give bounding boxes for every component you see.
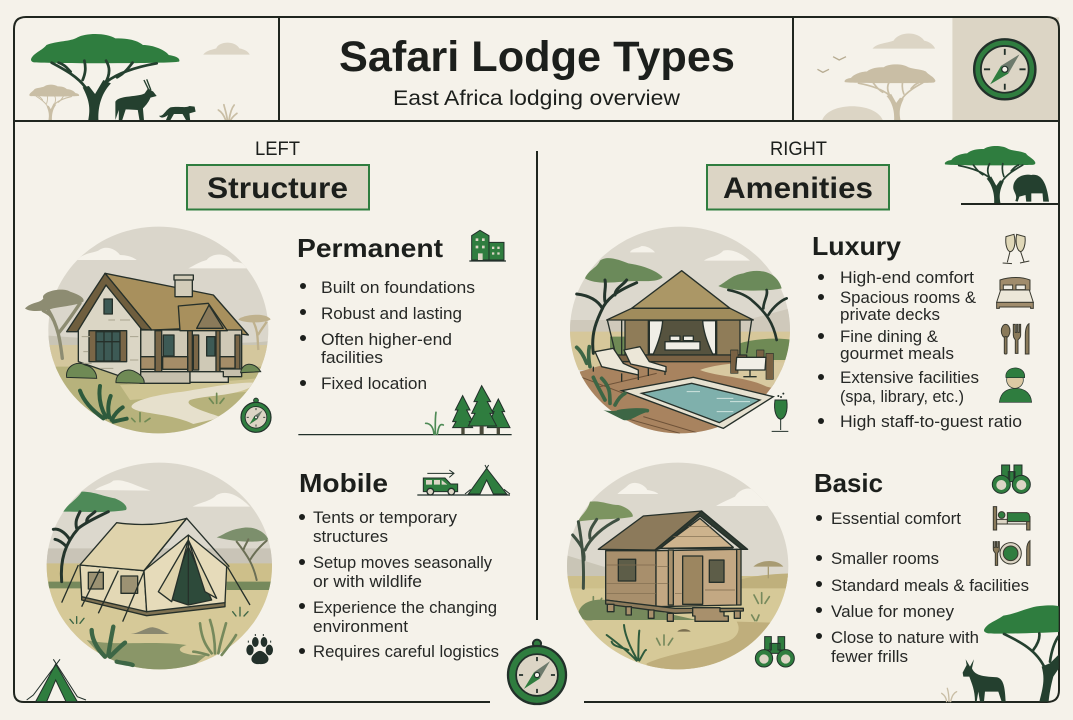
list: permanent traits [300, 278, 475, 393]
icon: cutlery [1001, 324, 1029, 354]
list: luxury features [818, 268, 1022, 431]
plants [607, 625, 646, 661]
icons: luxury amenities [997, 234, 1033, 402]
illustration: basic wooden cabin [567, 462, 795, 670]
list: mobile traits: Setup moves seasonally [313, 553, 492, 572]
icon: compass small [241, 398, 271, 432]
list: basic features: fewer frills [831, 647, 908, 666]
list: permanent traits: Robust and lasting [321, 304, 462, 323]
list: basic features [816, 509, 1029, 666]
list: basic features: Smaller rooms [831, 549, 939, 568]
list: basic features: Value for money [831, 602, 954, 621]
dining table [731, 350, 773, 379]
tent [607, 271, 753, 362]
compass panel background [952, 17, 1059, 121]
right column label: RIGHT [770, 139, 827, 160]
subtitle: East Africa lodging overview [393, 87, 681, 110]
list: luxury features: Fine dining & [840, 327, 939, 346]
icon: elephant [1013, 175, 1049, 202]
tent [62, 518, 250, 622]
tree left [25, 290, 84, 311]
heading: Amenities [707, 165, 889, 210]
list: luxury features: High-end comfort [840, 268, 974, 287]
list: mobile traits: Requires careful logistics [313, 642, 499, 661]
icon: champagne glasses [1003, 234, 1029, 264]
list: mobile traits: environment [313, 617, 408, 636]
icon: green acacia tree [31, 34, 179, 121]
list: basic features: Essential comfort [831, 509, 961, 528]
trees [578, 501, 633, 522]
plants [92, 627, 133, 665]
icon: wine glass [772, 400, 788, 431]
icon: compass [974, 39, 1035, 99]
icon: cloud [203, 43, 250, 55]
panel: Mobile [299, 465, 510, 661]
icon: grass tuft [218, 105, 237, 120]
list: mobile traits [299, 508, 499, 661]
illustration: green acacia and elephant [945, 146, 1049, 203]
list: basic features: Standard meals & facilities [831, 576, 1029, 595]
heading: Amenities: Amenities [723, 172, 873, 205]
tree right [238, 315, 271, 322]
title: Safari Lodge Types [339, 33, 735, 81]
bushes [67, 363, 261, 383]
icon: big cat [159, 106, 196, 120]
icon: antelope [963, 659, 1006, 702]
icon: birds [817, 57, 846, 72]
icon: plate and cutlery [993, 541, 1030, 565]
icon: trees and ground [298, 386, 512, 435]
icon: safari vehicle and tent [417, 465, 510, 495]
plants [80, 386, 127, 422]
illustration: mobile canvas tent [27, 457, 280, 702]
trees [585, 258, 663, 283]
heading: Structure [187, 165, 369, 210]
list: permanent traits: facilities [321, 348, 383, 367]
list: luxury features: (spa, library, etc.) [840, 387, 964, 406]
illustration: acacia and antelope corner [942, 605, 1060, 702]
trees [63, 492, 127, 512]
plants [577, 347, 647, 412]
illustration: permanent stone lodge [25, 220, 280, 440]
list: luxury features: Spacious rooms & [840, 288, 977, 307]
icon: binoculars [992, 465, 1030, 493]
icon: small tan acacia [29, 85, 79, 120]
icon: distant hill [822, 106, 883, 120]
list: mobile traits: structures [313, 527, 388, 546]
icon: bed [997, 277, 1033, 308]
list: permanent traits: Often higher-end [321, 330, 452, 349]
icon: tan acacia [845, 64, 935, 120]
heading: Mobile: Mobile [299, 468, 388, 498]
list: luxury features: High staff-to-guest ratio [840, 412, 1022, 431]
icon: large compass [508, 640, 566, 704]
header panel: right savanna scene with compass [817, 17, 1059, 121]
list: luxury features: Extensive facilities [840, 368, 979, 387]
list: luxury features: private decks [840, 305, 940, 324]
heading: Luxury: Luxury [812, 231, 902, 261]
lodge [67, 273, 248, 383]
icon: paw print [246, 634, 273, 664]
icon: buildings [469, 230, 506, 261]
icon: binoculars [755, 637, 794, 667]
icon: antelope [115, 79, 157, 120]
heading: Structure: Structure [207, 172, 348, 205]
panel: Luxury [812, 231, 1033, 431]
illustration: luxury safari tent [570, 226, 790, 434]
icon: staff member [999, 368, 1032, 402]
left column label: LEFT [255, 139, 300, 160]
heading: Basic: Basic [814, 468, 883, 498]
header panel: left savanna scene [29, 34, 250, 121]
panel: Permanent [297, 230, 512, 435]
cabin [598, 511, 748, 621]
header panel: title block [339, 33, 735, 110]
list: mobile traits: Tents or temporary [313, 508, 457, 527]
list: basic features: Close to nature with [831, 628, 979, 647]
list: mobile traits: or with wildlife [313, 572, 422, 591]
pool [622, 377, 773, 428]
list: luxury features: gourmet meals [840, 344, 954, 363]
list: permanent traits: Built on foundations [321, 278, 475, 297]
heading: Permanent: Permanent [297, 233, 443, 263]
loungers [593, 347, 666, 382]
icon: cloud [873, 34, 935, 49]
list: mobile traits: Experience the changing [313, 598, 497, 617]
icon: grass tuft [942, 688, 957, 702]
icon: simple bed [993, 507, 1030, 530]
list: permanent traits: Fixed location [321, 374, 427, 393]
icons: basic amenities [992, 465, 1030, 565]
panel: Basic [814, 465, 1030, 666]
icon: green tent [27, 659, 86, 702]
